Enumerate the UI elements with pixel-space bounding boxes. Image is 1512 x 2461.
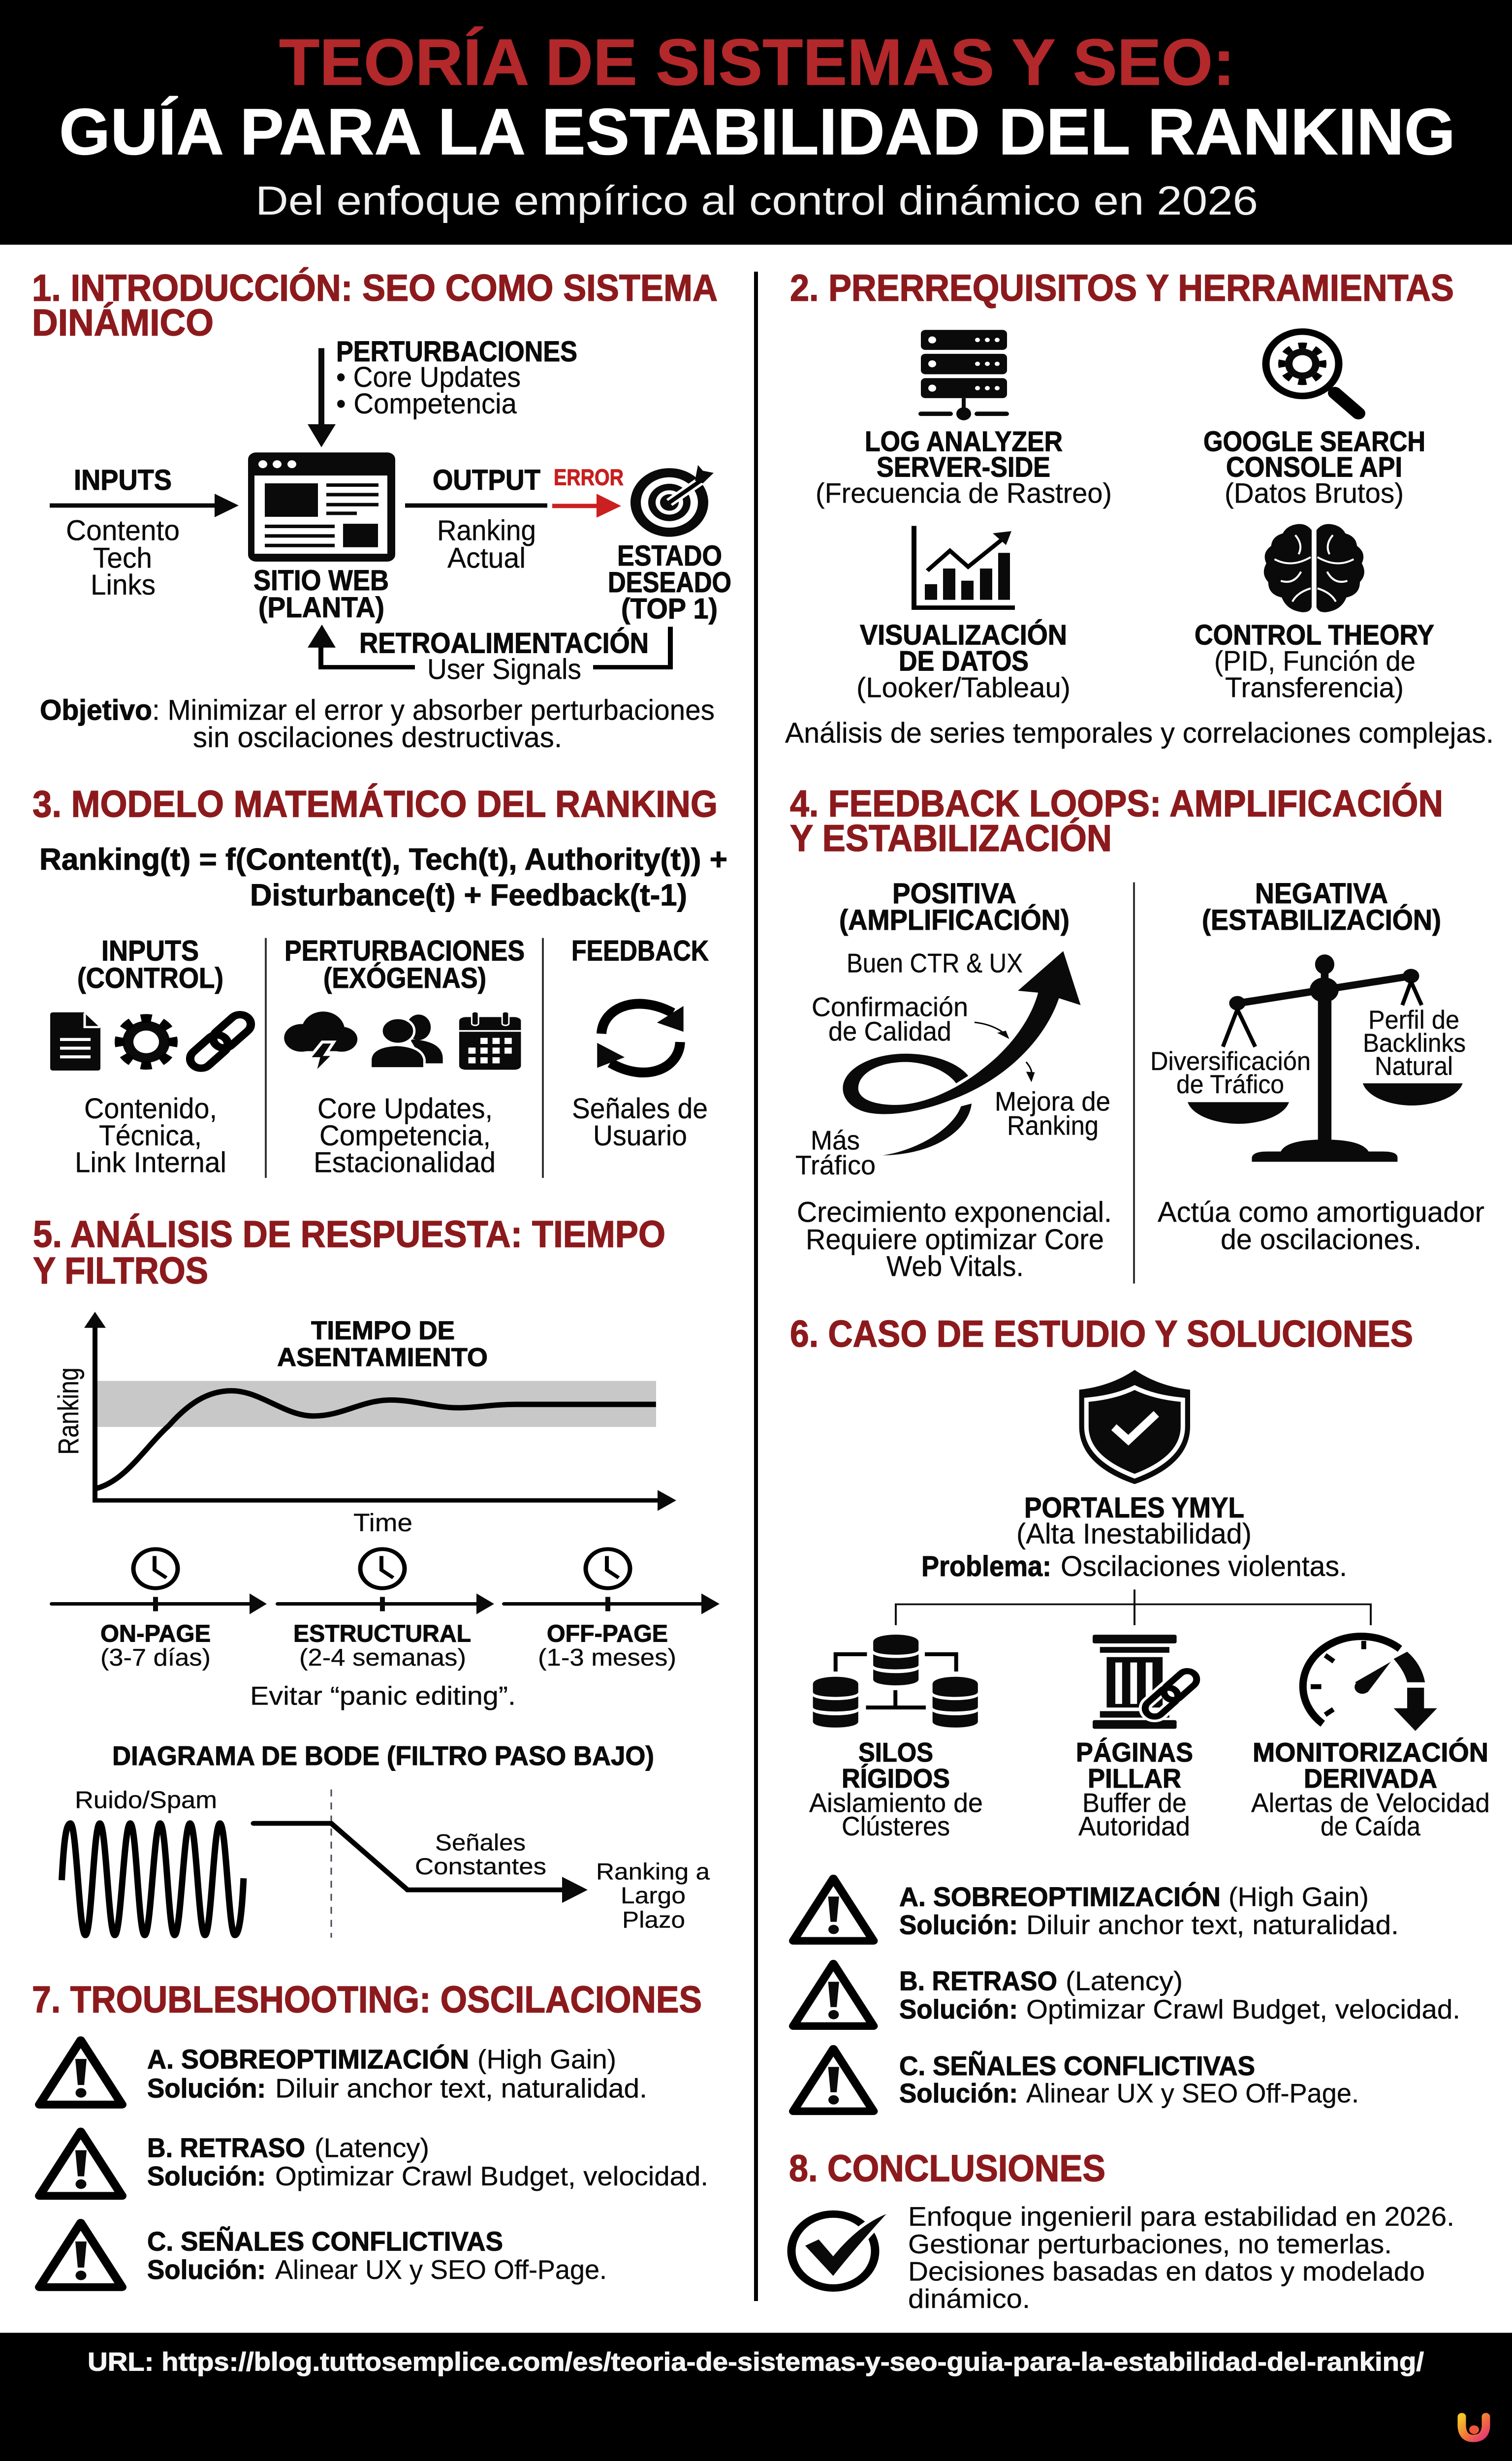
arrow: inputs: [50, 494, 239, 517]
plant label: [253, 565, 389, 624]
case label: [921, 1492, 1347, 1582]
disturbances text: Estacionalidad: [314, 1147, 496, 1179]
header panel: [0, 0, 1512, 245]
panel: section 5 response analysis: [33, 1214, 720, 1938]
warning item B left: [39, 2132, 708, 2196]
inputs list: [66, 515, 180, 601]
solution: rigid silos: RÍGIDOS: [842, 1763, 950, 1794]
inputs list: Tech: [93, 542, 152, 574]
warning item B right: Optimizar Crawl Budget, velocidad.: [1026, 1994, 1460, 2024]
desired state label: (TOP 1): [621, 593, 718, 625]
warning item C right: C. SEÑALES CONFLICTIVAS: [899, 2051, 1255, 2081]
scale labels: Diversificación: [1150, 1046, 1311, 1075]
tool: log analyzer: (Frecuencia de Rastreo): [816, 477, 1112, 509]
feedback text: [572, 1093, 708, 1152]
x axis label: Time: [353, 1508, 412, 1537]
subtitle: Del enfoque empírico al control dinámico en 2026: [255, 178, 1258, 223]
column heading: disturbances: (EXÓGENAS): [323, 962, 486, 994]
icon: bar and line chart: [914, 526, 1015, 608]
swoosh labels: Confirmación: [812, 992, 968, 1022]
warning item A right: Diluir anchor text, naturalidad.: [1026, 1910, 1399, 1940]
icon: browser window: [248, 452, 395, 562]
warning item C right: [793, 2049, 1359, 2111]
feedback label: User Signals: [427, 654, 581, 685]
formula: [39, 842, 727, 912]
ranking actual: Ranking: [437, 515, 536, 547]
scale labels: Backlinks: [1363, 1028, 1466, 1057]
ranking actual: Actual: [447, 542, 526, 574]
tool: log analyzer: LOG ANALYZER: [865, 425, 1063, 457]
tool: control theory: (PID, Función de: [1214, 645, 1416, 677]
conclusions text: [908, 2202, 1454, 2314]
objective text: [40, 694, 715, 754]
warning item B right: Solución:: [899, 1994, 1018, 2024]
bode cutoff dashed line: [331, 1790, 332, 1938]
constant signals label: Constantes: [415, 1853, 546, 1879]
warning item A right: (High Gain): [1228, 1882, 1369, 1912]
disturbances text: [314, 1093, 496, 1179]
panel: section 3 math model: [32, 784, 727, 1179]
heading 4: [790, 783, 1443, 859]
positive heading: (AMPLIFICACIÓN): [839, 904, 1070, 936]
divider: [1133, 883, 1135, 1284]
column heading: inputs: (CONTROL): [77, 963, 223, 994]
feedback text: Señales de: [572, 1093, 708, 1125]
inputs text: Link Internal: [75, 1147, 226, 1179]
icon: server: [918, 330, 1009, 420]
warning item A left: (High Gain): [477, 2045, 616, 2075]
icon: amplification swoosh arrow: [843, 951, 1081, 1155]
solution: pillar pages: Buffer de: [1082, 1788, 1187, 1818]
inputs text: Contenido,: [84, 1093, 217, 1125]
objective text: Objetivo: [40, 694, 152, 726]
conclusions text: dinámico.: [908, 2284, 1030, 2314]
warning item C left: Alinear UX y SEO Off-Page.: [275, 2255, 607, 2285]
constant signals label: Señales: [435, 1829, 526, 1856]
solution: rigid silos: SILOS: [858, 1737, 933, 1767]
solution: derivative monitoring: [1251, 1737, 1490, 1841]
solution: pillar pages: PILLAR: [1088, 1764, 1181, 1794]
response curve: [95, 1391, 656, 1489]
icon: link: [186, 1010, 255, 1072]
icon: brand logo: [1462, 2417, 1486, 2438]
inputs list: Links: [91, 569, 156, 601]
inputs text: [75, 1093, 226, 1179]
bode filter response arrow: [253, 1824, 588, 1903]
case label: Oscilaciones violentas.: [1061, 1551, 1347, 1582]
icon: check circle: [791, 2214, 886, 2288]
long term ranking label: [596, 1858, 710, 1933]
disturbances label: PERTURBACIONES: [336, 336, 577, 368]
warning item A left: [39, 2040, 647, 2105]
timeline: off-page: (1-3 meses): [538, 1644, 676, 1671]
long term ranking label: Largo: [621, 1882, 686, 1908]
solution: rigid silos: Clústeres: [842, 1812, 950, 1841]
negative heading: NEGATIVA: [1255, 878, 1388, 910]
panel: section 6 case study: [790, 1313, 1490, 2111]
tool: data visualization: [856, 619, 1071, 703]
chart: settling time: [52, 1312, 676, 1537]
column heading: disturbances: [284, 935, 525, 994]
conclusions text: Gestionar perturbaciones, no temerlas.: [908, 2229, 1392, 2259]
conclusions text: Enfoque ingenieril para estabilidad en 2026.: [908, 2202, 1454, 2232]
heading 1: [32, 267, 718, 344]
heading 5: Y FILTROS: [33, 1250, 208, 1292]
solution: derivative monitoring: DERIVADA: [1304, 1764, 1437, 1794]
noise wave: [62, 1824, 244, 1935]
case label: PORTALES YMYL: [1024, 1492, 1244, 1524]
scale labels: de Tráfico: [1176, 1070, 1284, 1099]
output label: OUTPUT: [433, 465, 540, 496]
panel: section 7 troubleshooting: [32, 1979, 708, 2287]
noise label: Ruido/Spam: [75, 1787, 217, 1814]
icon: balance scale: [1188, 954, 1463, 1162]
warning item A left: A. SOBREOPTIMIZACIÓN: [147, 2044, 469, 2075]
settling title: ASENTAMIENTO: [277, 1343, 488, 1372]
plant label: (PLANTA): [258, 592, 384, 624]
swoosh labels: de Calidad: [828, 1016, 951, 1046]
disturbances label: • Competencia: [336, 388, 517, 420]
icon: people: [371, 1014, 443, 1069]
timeline: off-page: [502, 1549, 720, 1671]
axes: [84, 1312, 676, 1511]
warning item B right: B. RETRASO: [899, 1966, 1057, 1996]
feedback label: RETROALIMENTACIÓN: [359, 627, 649, 659]
warning item A right: A. SOBREOPTIMIZACIÓN: [899, 1882, 1221, 1912]
icon: database silos: [813, 1635, 978, 1728]
error label: ERROR: [554, 465, 624, 490]
solution: derivative monitoring: de Caída: [1321, 1812, 1420, 1841]
heading 1: DINÁMICO: [32, 302, 214, 344]
output line: [405, 504, 547, 507]
warning item B left: Optimizar Crawl Budget, velocidad.: [275, 2161, 708, 2191]
panel: section 1 introduction: [32, 267, 731, 754]
desired state label: DESEADO: [608, 567, 731, 599]
tool: search console: CONSOLE API: [1226, 451, 1402, 483]
footer panel: [0, 2333, 1512, 2461]
warning item B right: [793, 1964, 1460, 2026]
inputs label: INPUTS: [74, 465, 172, 496]
footer url: URL: https://blog.tuttosemplice.com/es/teoria-de-sistemas-y-seo-guia-para-la-estabilidad-del-ranking/: [88, 2347, 1424, 2376]
long term ranking label: Ranking a: [596, 1858, 710, 1885]
column heading: disturbances: PERTURBACIONES: [284, 935, 525, 967]
heading 3: 3. MODELO MATEMÁTICO DEL RANKING: [32, 784, 718, 825]
swoosh labels: Tráfico: [795, 1150, 876, 1180]
negative text: de oscilaciones.: [1221, 1224, 1421, 1256]
icon: magnifier gear: [1266, 332, 1358, 413]
timeline: on-page: (3-7 días): [100, 1644, 211, 1671]
objective text: sin oscilaciones destructivas.: [193, 722, 562, 754]
warning item C left: [39, 2223, 607, 2287]
settling title: [277, 1316, 488, 1372]
warning item A right: [793, 1878, 1399, 1941]
conclusions text: Decisiones basadas en datos y modelado: [908, 2257, 1425, 2287]
title line red: TEORÍA DE SISTEMAS Y SEO:: [279, 26, 1235, 99]
tool: control theory: CONTROL THEORY: [1195, 619, 1434, 651]
settling band: [96, 1381, 656, 1427]
icon: pillar with link: [1093, 1635, 1200, 1729]
warning item B right: (Latency): [1066, 1966, 1183, 1996]
icon: brain: [1264, 524, 1364, 612]
heading 4: Y ESTABILIZACIÓN: [790, 818, 1112, 859]
negative heading: [1202, 878, 1441, 936]
feedback text: Usuario: [593, 1120, 687, 1152]
column heading: inputs: [77, 935, 223, 994]
panel: section 4 feedback loops: [790, 783, 1484, 1284]
solution: pillar pages: Autoridad: [1078, 1812, 1190, 1841]
column dividers: [265, 938, 544, 1178]
long term ranking label: Plazo: [622, 1906, 685, 1933]
heading 5: [33, 1214, 665, 1292]
case label: (Alta Inestabilidad): [1016, 1518, 1252, 1550]
heading 1: 1. INTRODUCCIÓN: SEO COMO SISTEMA: [32, 267, 718, 309]
arrow: disturbances down: [308, 348, 336, 447]
icon: speed gauge with down arrow: [1303, 1637, 1437, 1731]
icon: shield: [1079, 1370, 1190, 1484]
ranking actual: [437, 515, 536, 574]
warning item A right: Solución:: [899, 1910, 1018, 1940]
tree connector: [896, 1589, 1371, 1625]
disturbances text: Core Updates,: [317, 1093, 493, 1125]
disturbances text: Competencia,: [319, 1120, 491, 1152]
tool: control theory: [1195, 619, 1434, 703]
warning item A left: Solución:: [147, 2074, 266, 2104]
formula: Ranking(t) = f(Content(t), Tech(t), Authority(t)) +: [39, 842, 727, 876]
case label: Problema:: [921, 1551, 1051, 1582]
positive heading: [839, 878, 1070, 936]
tool: control theory: Transferencia): [1225, 671, 1404, 703]
scale labels: Perfil de: [1368, 1006, 1459, 1034]
note: panic editing: Evitar “panic editing”.: [250, 1681, 516, 1710]
column heading: inputs: INPUTS: [101, 935, 199, 967]
warning item C right: Solución:: [899, 2079, 1018, 2109]
warning item B left: B. RETRASO: [147, 2133, 305, 2163]
tool: data visualization: VISUALIZACIÓN: [860, 619, 1067, 651]
settling title: TIEMPO DE: [311, 1316, 455, 1345]
objective text: : Minimizar el error y absorber perturbaciones: [152, 694, 715, 726]
desired state label: [608, 540, 731, 625]
constant signals label: [415, 1829, 546, 1879]
arrow: error: [552, 494, 621, 518]
positive heading: POSITIVA: [892, 878, 1016, 910]
y axis label: Ranking: [52, 1367, 85, 1455]
positive text: Web Vitals.: [886, 1251, 1024, 1283]
solution: rigid silos: Aislamiento de: [809, 1788, 983, 1818]
positive text: Crecimiento exponencial.: [797, 1197, 1112, 1228]
icon: storm cloud: [284, 1011, 357, 1074]
column heading: feedback: FEEDBACK: [571, 935, 709, 967]
warning item C left: Solución:: [147, 2255, 266, 2285]
solution: rigid silos: [809, 1737, 983, 1841]
panel: section 8 conclusions: [789, 2148, 1454, 2314]
tool: search console: [1203, 425, 1425, 509]
timeline: on-page: ON-PAGE: [100, 1620, 211, 1647]
warning item C left: C. SEÑALES CONFLICTIVAS: [147, 2226, 503, 2257]
timeline: structural: (2-4 semanas): [299, 1644, 466, 1671]
positive text: Requiere optimizar Core: [806, 1224, 1104, 1256]
desired state label: ESTADO: [617, 540, 722, 572]
icon: gear: [120, 1018, 173, 1065]
plant label: SITIO WEB: [253, 565, 389, 597]
tool: search console: (Datos Brutos): [1225, 477, 1404, 509]
timeline: structural: [276, 1549, 494, 1671]
tool: search console: GOOGLE SEARCH: [1203, 425, 1425, 457]
panel: section 2 tools: [785, 268, 1494, 749]
swoosh labels: Más: [811, 1126, 860, 1156]
positive text: [797, 1197, 1112, 1283]
heading 7: 7. TROUBLESHOOTING: OSCILACIONES: [32, 1979, 702, 2021]
icon: calendar: [459, 1011, 521, 1070]
formula: Disturbance(t) + Feedback(t-1): [250, 878, 687, 912]
icon: target: [630, 465, 714, 537]
swoosh labels: [795, 948, 1110, 1180]
tool: data visualization: DE DATOS: [899, 645, 1029, 677]
timeline: off-page: OFF-PAGE: [547, 1620, 668, 1647]
disturbances label: [336, 336, 577, 420]
icon: sync arrows: [597, 1004, 684, 1073]
column divider: [754, 272, 758, 2301]
negative text: [1158, 1197, 1484, 1256]
solution: pillar pages: [1076, 1737, 1193, 1841]
feedback label: [359, 627, 649, 685]
tool: data visualization: (Looker/Tableau): [856, 671, 1071, 703]
timeline: on-page: [50, 1549, 267, 1671]
warning item B left: (Latency): [315, 2133, 429, 2163]
warning item B left: Solución:: [147, 2161, 266, 2191]
inputs text: Técnica,: [99, 1120, 202, 1152]
bode heading: DIAGRAMA DE BODE (FILTRO PASO BAJO): [112, 1741, 654, 1771]
timeline: structural: ESTRUCTURAL: [293, 1620, 471, 1647]
warning item C right: Alinear UX y SEO Off-Page.: [1026, 2079, 1359, 2109]
warning item A left: Diluir anchor text, naturalidad.: [275, 2074, 647, 2104]
disturbances label: • Core Updates: [336, 361, 521, 393]
swoosh labels: Ranking: [1007, 1111, 1099, 1141]
scale labels: [1150, 1006, 1466, 1099]
negative heading: (ESTABILIZACIÓN): [1202, 904, 1441, 936]
swoosh labels: Buen CTR & UX: [847, 948, 1023, 978]
swoosh labels: Mejora de: [995, 1087, 1110, 1116]
icon: document: [50, 1012, 100, 1071]
scale labels: Natural: [1375, 1051, 1453, 1080]
tool: log analyzer: SERVER-SIDE: [877, 451, 1050, 483]
tool: log analyzer: [816, 425, 1112, 509]
inputs list: Contento: [66, 515, 180, 547]
solution: pillar pages: PÁGINAS: [1076, 1737, 1193, 1767]
heading 5: 5. ANÁLISIS DE RESPUESTA: TIEMPO: [33, 1214, 665, 1255]
arrow: feedback: [308, 625, 670, 667]
heading 8: 8. CONCLUSIONES: [789, 2148, 1105, 2189]
